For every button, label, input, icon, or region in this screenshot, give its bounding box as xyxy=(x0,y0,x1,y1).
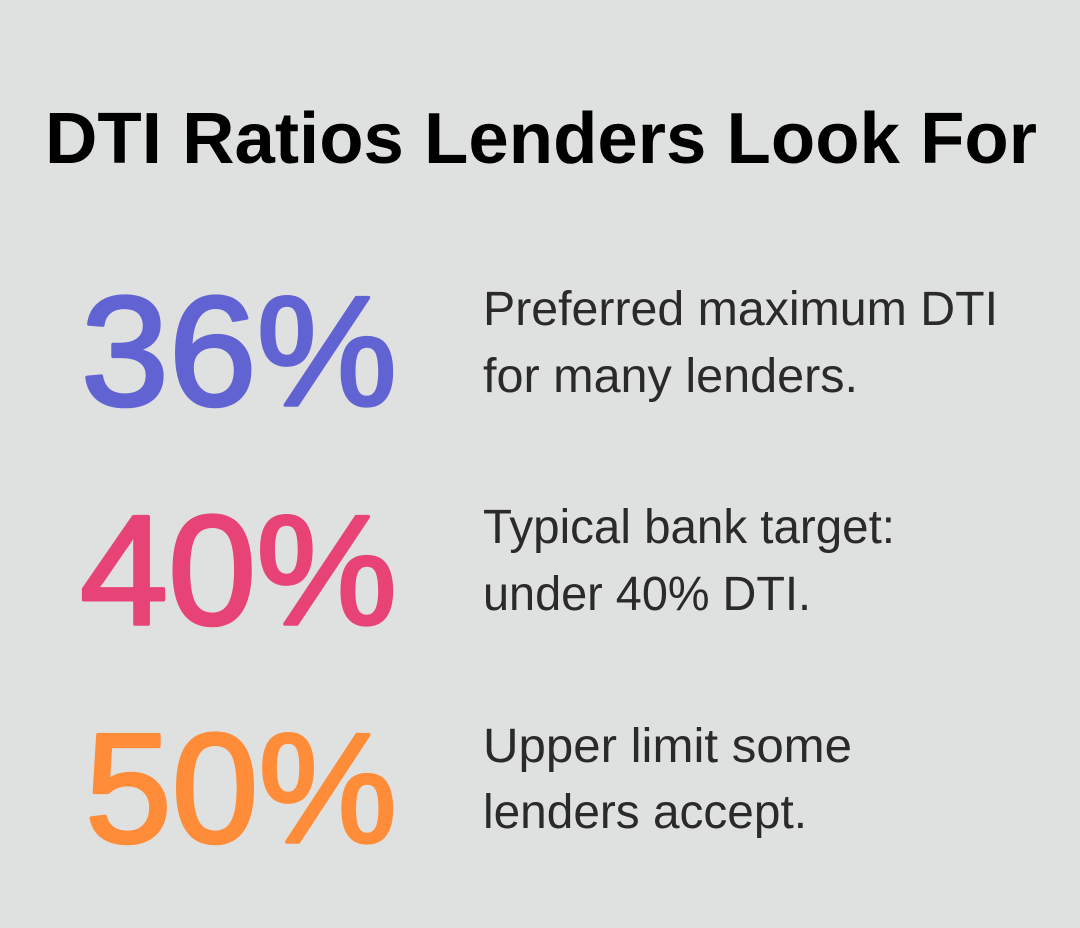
description: upper limit: lenders accept. xyxy=(483,786,807,839)
description: preferred maximum: for many lenders. xyxy=(483,350,858,403)
stat number: 40%: 40% xyxy=(80,484,397,658)
description: upper limit: Upper limit some xyxy=(483,720,852,773)
description: preferred maximum xyxy=(483,283,998,403)
stat row: 36% xyxy=(81,265,998,439)
description: typical bank target: under 40% DTI. xyxy=(483,568,811,621)
stat number: 36%: 36% xyxy=(81,265,397,439)
stat number: 50%: 50% xyxy=(85,702,397,876)
stat row: 50% xyxy=(85,702,852,876)
description: upper limit xyxy=(483,720,852,839)
title: DTI Ratios Lenders Look For xyxy=(45,99,1037,179)
description: typical bank target: Typical bank target: xyxy=(483,501,895,554)
description: typical bank target xyxy=(483,501,895,621)
description: preferred maximum: Preferred maximum DTI xyxy=(483,283,998,336)
stat row: 40% xyxy=(80,484,895,658)
